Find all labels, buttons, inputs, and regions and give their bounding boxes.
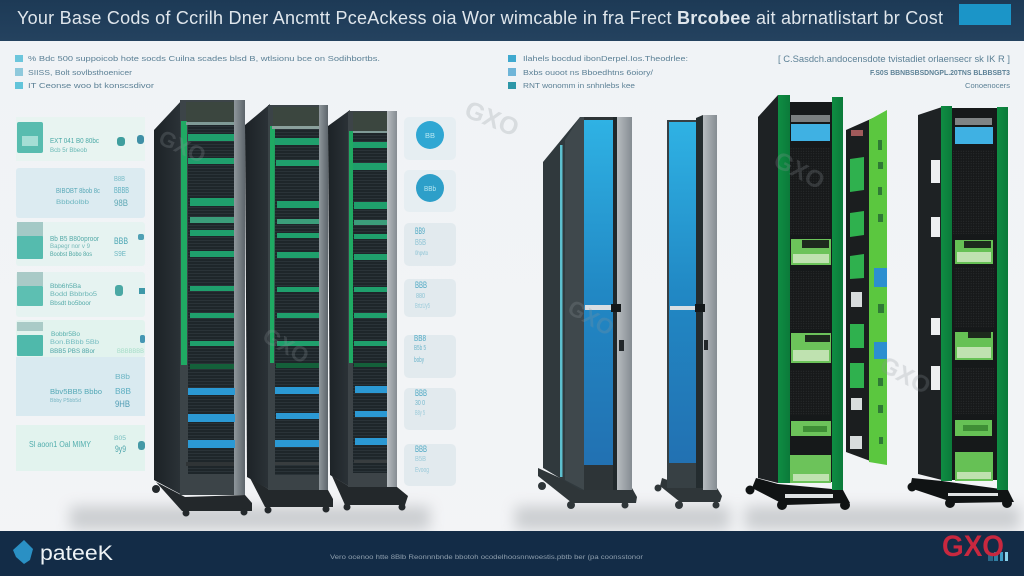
rack base xyxy=(152,482,252,516)
legend: middle: RNT wonomm in snhnlebs kee xyxy=(523,81,635,90)
card 7: BBB xyxy=(415,444,427,454)
card 3 xyxy=(404,223,456,266)
tower base xyxy=(746,478,850,510)
card 7: Evoog xyxy=(415,467,429,474)
rack base xyxy=(332,476,408,510)
row 2: Bbbdolbb xyxy=(56,199,89,206)
legend: middle xyxy=(508,54,688,90)
row 7: B05 xyxy=(114,435,126,442)
card 3: B5B xyxy=(415,238,426,247)
card 1 with badge: BB xyxy=(425,133,435,140)
row 4: Bodd Bbbrbo5 xyxy=(50,291,97,298)
rack shelves xyxy=(353,131,387,445)
legend: left: SIISS, Bolt sovlbsthoenicer xyxy=(28,68,133,77)
legend: left: IT Ceonse woo bt konscsdivor xyxy=(28,81,155,90)
legend: right: F.S0S BBNBSBSDNGPL.20TNS BLBBSBT3 xyxy=(870,68,1010,77)
blue screen xyxy=(791,124,830,141)
card 7: B5B xyxy=(415,456,426,463)
card 4 xyxy=(404,279,456,317)
watermarks: GXO xyxy=(564,295,618,341)
row 5: Bobbr5Bo xyxy=(51,331,80,338)
card 4: 880 xyxy=(416,293,425,300)
blue screen xyxy=(955,127,993,144)
watermarks: GXO xyxy=(875,351,935,400)
watermarks: GXO xyxy=(769,146,829,195)
door indicators xyxy=(850,157,864,388)
watermarks: GXO xyxy=(461,96,523,142)
row 1: EXT 041 B0 80bc xyxy=(50,138,99,145)
row 5: BBBBBBB xyxy=(117,348,144,355)
tower base xyxy=(908,478,1014,508)
GXO red mark: GXO xyxy=(942,530,1004,563)
row 2 xyxy=(16,168,145,218)
title: Your Base Cods of Ccrilh Dner Ancmtt PceAckess oia Wor wimcable in fra Frect Brcobee ait abrnatlistart br Cost xyxy=(17,8,943,28)
row 6: Bbby P5bb5d xyxy=(50,398,81,404)
row 7: Sl aoon1 Oal MIMY xyxy=(29,440,92,449)
card 6: B8y 5 xyxy=(415,410,425,417)
row 3: S9E xyxy=(114,249,126,258)
legend: right xyxy=(778,54,1010,90)
tower base xyxy=(538,468,637,509)
footer note: Vero ocenoo htte 8Blb Reonnnbnde bbotoh ocodelhoosnnwoestis.pbtb ber (pa coonsstonor xyxy=(330,554,644,561)
card 2 with badge: BBb xyxy=(424,186,436,193)
card 4: BrtzUy5 xyxy=(415,303,430,310)
rack shelves xyxy=(186,122,235,448)
header bar xyxy=(0,0,1024,41)
row 3: Bapegr nor v 9 xyxy=(50,244,91,250)
floor shadows xyxy=(70,506,1020,530)
blue screen xyxy=(584,120,614,465)
row 4: Bbsdt bo5boor xyxy=(50,300,92,307)
footer bar xyxy=(0,530,1024,576)
card 5: B5b 5 xyxy=(414,345,426,352)
row 5: BBB5 PBS 8Bor xyxy=(50,348,96,355)
row 2: BBBB xyxy=(114,186,129,195)
blue screen xyxy=(669,122,696,463)
legend: left: % Bdc 500 suppoicob hote socds Cuilna scades blsd B, wtlsionu bce on Sodihbortbs. xyxy=(28,54,380,63)
rack shelves xyxy=(272,126,319,447)
card 4: BBB xyxy=(415,280,427,290)
card 1 with badge xyxy=(404,117,456,160)
detached green door panel xyxy=(846,110,887,465)
card 6 xyxy=(404,388,456,430)
card 5 xyxy=(404,334,456,378)
tower base xyxy=(654,478,722,509)
green modules xyxy=(955,240,993,481)
row 6: 9HB xyxy=(115,399,130,409)
card 6: BBB xyxy=(415,388,427,398)
row 5 xyxy=(16,320,145,357)
footer bars glyph xyxy=(988,552,1008,561)
card 3: BB9 xyxy=(415,226,425,236)
row 6: B8b xyxy=(115,374,130,381)
side white labels xyxy=(931,160,940,390)
row 7: 9y9 xyxy=(115,444,126,454)
watermarks xyxy=(155,96,935,400)
row 6: B8B xyxy=(115,386,131,396)
blue tower 2 xyxy=(654,115,722,509)
legend: right: Conoenocers xyxy=(965,81,1010,90)
green modules xyxy=(790,239,831,483)
card 3: 0hpvto xyxy=(415,251,428,257)
row 2: BIBOBT 8bob 8c xyxy=(56,188,100,195)
rack 3 xyxy=(328,110,408,510)
card 5: boby xyxy=(414,357,424,364)
row 2: B8B xyxy=(114,176,125,183)
latch bar xyxy=(670,306,695,310)
rack base xyxy=(250,478,333,514)
panel: right cards xyxy=(404,117,456,486)
rack 2 xyxy=(245,104,333,514)
mesh area xyxy=(790,147,830,235)
row 1 xyxy=(16,117,145,161)
legend: middle: Ilahels bocdud ibonDerpel.Ios.Theodrlee: xyxy=(523,54,688,63)
row 6: Bbv5BB5 Bbbo xyxy=(50,389,102,396)
logo wordmark: pateeK xyxy=(40,542,113,565)
green door strip xyxy=(270,126,275,363)
cyan side strip xyxy=(560,145,562,477)
blue tower 1 xyxy=(538,117,637,509)
card 2 with badge xyxy=(404,170,456,212)
row 3 xyxy=(16,222,145,266)
row 3: Bb B5 B80oproor xyxy=(50,236,100,243)
row 6 xyxy=(16,357,145,416)
row 1: Bcb 5r Bbeob xyxy=(50,148,88,154)
green tower 1 xyxy=(746,95,850,510)
watermarks: GXO xyxy=(155,125,210,168)
legend: left xyxy=(15,54,380,90)
row 2: 98B xyxy=(114,198,128,208)
rack 1 xyxy=(152,100,252,516)
legend: middle: Bxbs ouoot ns Bboedhtns 6oiory/ xyxy=(523,68,654,77)
row 3: Boobst Bobo 8os xyxy=(50,251,93,258)
green door strip xyxy=(181,121,187,365)
row 3: BBB xyxy=(114,236,128,246)
card 7 xyxy=(404,444,456,486)
card 6: 30 0 xyxy=(415,400,425,407)
row 4 xyxy=(16,272,145,317)
watermarks: GXO xyxy=(258,323,313,369)
row 5: Bon.BBbb 5Bb xyxy=(50,339,99,346)
card 5: BB8 xyxy=(414,334,426,343)
mesh area xyxy=(953,150,994,234)
header blue badge xyxy=(959,4,1011,25)
latch bar xyxy=(585,305,613,310)
logo icon xyxy=(13,540,33,564)
green tower 2 xyxy=(908,106,1014,508)
row 7 xyxy=(16,425,145,471)
green door strip xyxy=(349,131,353,363)
panel: left stacked table xyxy=(16,117,145,471)
row 4: Bbb6h5Ba xyxy=(50,283,81,290)
legend: right: [ C.Sasdch.andocensdote tvistadiet orlaensecr sk IK R ] xyxy=(778,54,1010,64)
